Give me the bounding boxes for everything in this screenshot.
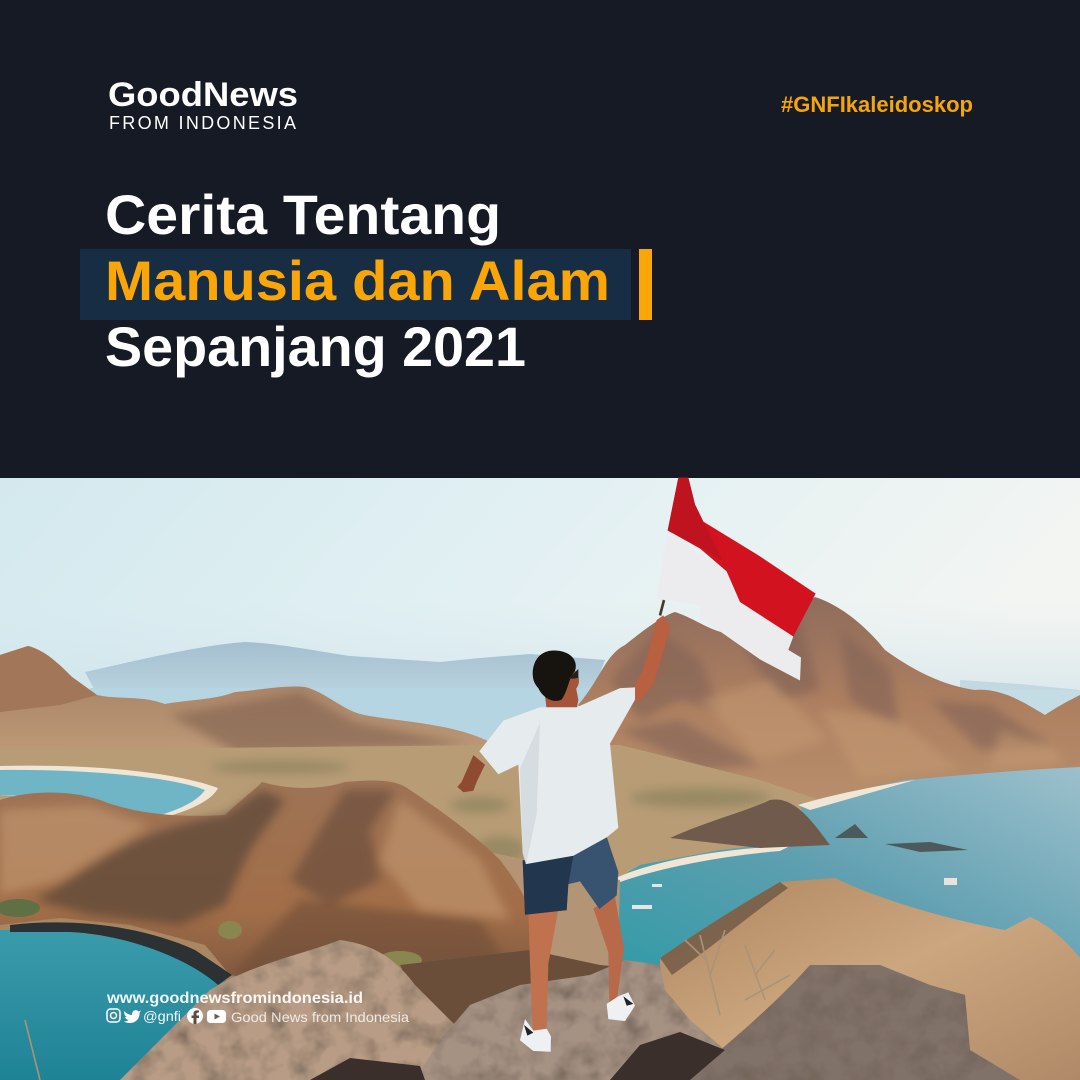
legs xyxy=(528,909,558,1031)
right mountain ridges xyxy=(610,620,1050,770)
title line 2: Manusia dan Alam xyxy=(105,249,610,312)
website: www.goodnewsfromindonesia.id xyxy=(106,990,363,1007)
middle valley land xyxy=(0,745,820,900)
t-shirt xyxy=(479,687,635,864)
logo: GoodNews from Indonesia: FROM INDONESIA xyxy=(109,113,296,133)
valley slope behind man xyxy=(450,850,620,1020)
left mountain range xyxy=(0,646,490,775)
lowered arm xyxy=(457,755,485,792)
sky xyxy=(0,478,1080,778)
title highlight band xyxy=(80,249,631,320)
flag white stripe xyxy=(657,530,801,680)
shoes xyxy=(520,1019,551,1052)
dark header background xyxy=(0,0,1080,478)
left foreground hill xyxy=(0,780,535,1015)
bottom-left sea xyxy=(0,930,235,1080)
foreground rocks xyxy=(120,940,1020,1080)
flag red stripe xyxy=(668,478,816,636)
footer url and social xyxy=(106,990,409,1025)
right sea xyxy=(615,767,1080,1000)
man and flag xyxy=(457,478,816,1052)
hill shadows xyxy=(35,790,530,1000)
icon: instagram xyxy=(107,1009,120,1022)
distant mountains xyxy=(85,642,605,700)
twitter handle: @gnfi xyxy=(143,1008,181,1024)
icon: youtube xyxy=(207,1010,226,1023)
head xyxy=(558,668,579,693)
title accent bar xyxy=(639,249,652,320)
valley behind rocks xyxy=(400,950,660,1040)
rock shadows xyxy=(310,1032,725,1080)
title line 1: Cerita Tentang xyxy=(105,183,501,246)
distant sea xyxy=(90,688,610,748)
logo: GoodNews from Indonesia: GoodNews xyxy=(108,76,298,114)
small islets and boats xyxy=(835,824,968,852)
beach on right xyxy=(616,846,790,882)
channel name: Good News from Indonesia xyxy=(231,1009,409,1025)
big right mountain xyxy=(578,597,1080,805)
shorts xyxy=(523,837,618,915)
photo: man holding flag above Padar island xyxy=(0,478,1080,1080)
dry shrubs xyxy=(25,930,790,1080)
small headland xyxy=(670,799,830,848)
hair xyxy=(533,650,576,701)
left lagoon and beach xyxy=(0,766,218,822)
raised arm xyxy=(632,615,670,703)
icon: twitter xyxy=(124,1010,141,1023)
flag pole xyxy=(660,600,664,615)
hashtag: #GNFIkaleidoskop xyxy=(781,92,973,117)
neck xyxy=(545,682,578,709)
green bushes on shore xyxy=(0,899,40,917)
title line 3: Sepanjang 2021 xyxy=(105,315,526,378)
right foreground hill xyxy=(660,878,1080,1080)
logo: GoodNews from Indonesia xyxy=(108,76,298,133)
dark shoreline xyxy=(10,922,232,985)
title block xyxy=(80,183,652,378)
icon: facebook xyxy=(187,1008,203,1024)
sunglasses xyxy=(568,669,578,679)
land base xyxy=(0,750,1080,1080)
